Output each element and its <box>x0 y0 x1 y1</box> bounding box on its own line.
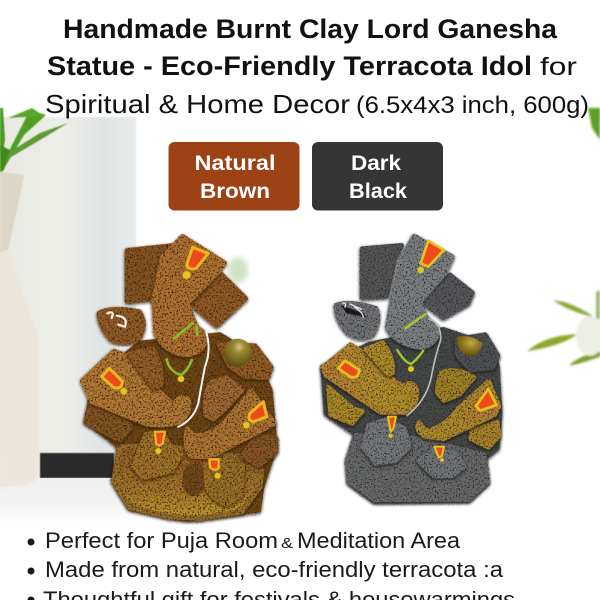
button: Dark Black: Dark <box>351 152 401 175</box>
plant leaves left <box>0 108 68 172</box>
button: Natural Brown: Brown <box>200 180 270 203</box>
bullet list <box>28 528 515 600</box>
statue: dark black Ganesha <box>323 236 500 501</box>
ball <box>457 336 483 356</box>
button: Natural Brown: Natural <box>194 152 276 175</box>
plant leaves right <box>530 108 600 365</box>
green necklace <box>397 314 425 364</box>
title: for <box>540 53 577 81</box>
background room photo <box>0 108 600 523</box>
Om symbol <box>107 312 126 327</box>
tilak marks <box>338 241 497 457</box>
title: Spiritual & Home Decor <box>45 89 350 119</box>
bullet: puja room: Meditation Area <box>297 528 461 553</box>
yellow dots <box>120 271 250 479</box>
button: Dark Black <box>312 142 443 210</box>
Om symbol <box>341 305 367 317</box>
bullet: puja room <box>28 528 461 553</box>
tilak marks <box>102 247 267 470</box>
white thread <box>177 331 209 427</box>
blurred green behind statue <box>228 257 248 283</box>
statue: natural brown Ganesha <box>83 237 276 518</box>
silver thread <box>407 318 441 416</box>
bullet: terracotta: Made from natural, eco-friendly terracota :a <box>45 557 504 582</box>
button: Dark Black: Black <box>349 180 407 203</box>
bullet: puja room: Perfect for Puja Room <box>45 528 278 553</box>
bullet: puja room: & <box>281 535 293 552</box>
vase <box>0 172 39 488</box>
title: (6.5x4x3 inch, 600g) <box>356 92 589 119</box>
green necklace <box>167 323 197 375</box>
title: Statue - Eco-Friendly Terracota Idol <box>47 51 532 81</box>
title <box>45 14 589 119</box>
title: Handmade Burnt Clay Lord Ganesha <box>63 14 558 44</box>
yellow dots <box>389 267 444 462</box>
ball <box>224 339 252 367</box>
button: Natural Brown <box>168 142 300 210</box>
